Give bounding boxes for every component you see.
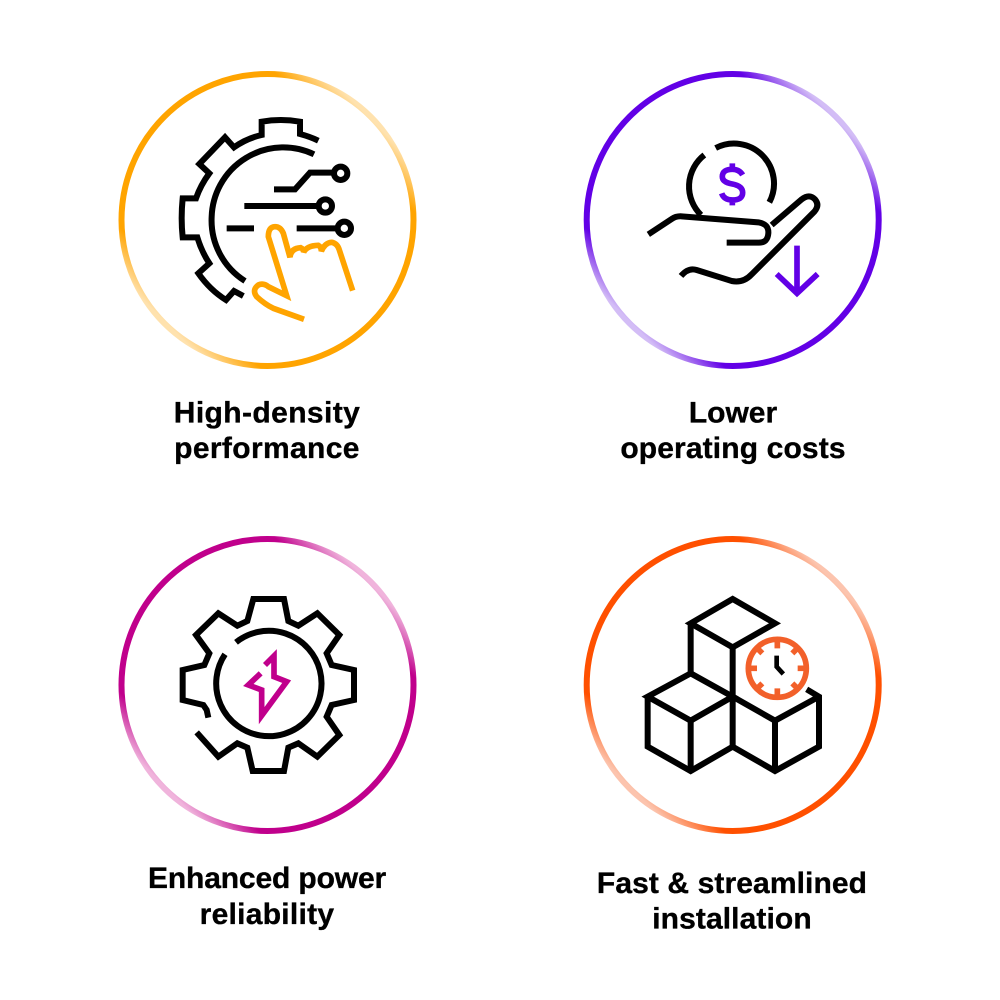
panel: enhanced power reliability [122, 539, 414, 931]
heading: installation [652, 902, 812, 936]
heading: operating costs [620, 432, 846, 465]
ring: purple [587, 74, 879, 366]
heading: reliability [200, 898, 334, 931]
icon: cubes with clock [648, 599, 819, 771]
icon: gear with circuits and pointing hand [182, 120, 353, 319]
ring: magenta [122, 539, 414, 831]
panel: fast and streamlined installation [587, 539, 879, 936]
panel: lower operating costs [587, 74, 879, 465]
heading: Fast & streamlined [597, 867, 867, 900]
icon: gear with lightning bolt [183, 599, 354, 771]
heading: Lower [689, 396, 777, 430]
ring: red-orange [587, 539, 879, 831]
heading: Enhanced power [148, 862, 387, 895]
icon: hand holding coin with down arrow [648, 144, 818, 293]
ring: orange [122, 74, 414, 366]
heading: High-density [174, 396, 360, 430]
panel: high-density performance [122, 74, 414, 465]
heading: performance [174, 432, 360, 465]
